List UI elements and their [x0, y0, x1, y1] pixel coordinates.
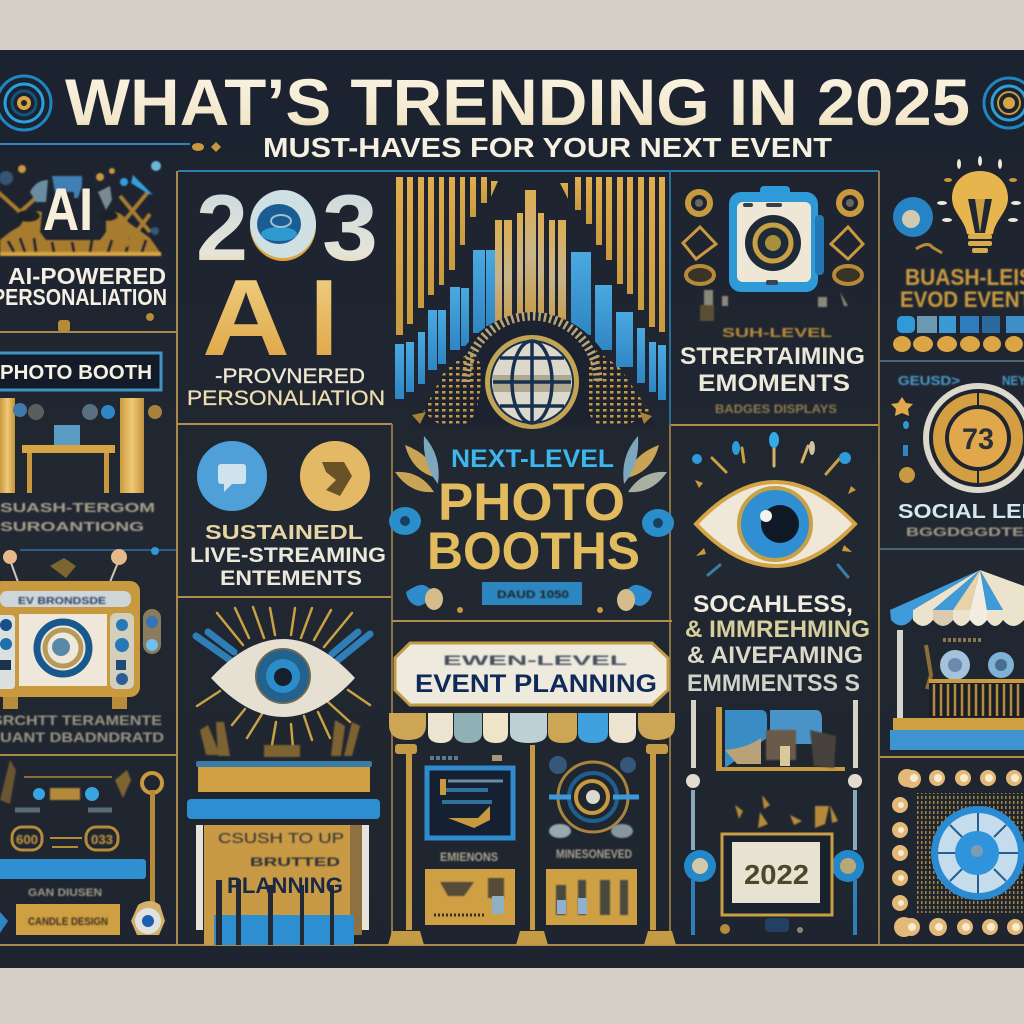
AI label: AI: [43, 176, 93, 243]
panel: light dial: [892, 769, 1024, 937]
awning: [389, 713, 675, 743]
panel: bright idea: [893, 156, 1024, 352]
enhancements text: EMOMENTS: [698, 370, 850, 397]
caption right: MINESONEVED: [556, 847, 632, 861]
gold deck: [893, 718, 1024, 730]
crown decoration: [0, 161, 162, 256]
social caption: BGGDGGDTE: [906, 525, 1024, 539]
blue banner: [187, 799, 380, 819]
TV legs: [3, 697, 127, 709]
sign small text: EWEN-LEVEL: [443, 652, 628, 668]
panel: AI powered personalization: [0, 161, 167, 310]
framed screen: [722, 834, 832, 915]
rays: [692, 432, 856, 577]
small heading: SUH-LEVEL: [722, 325, 832, 340]
planning text: PLANNING: [227, 873, 343, 898]
heading text: AI-POWERED: [8, 263, 166, 289]
panel: retro TV: [0, 547, 164, 745]
icon: chat bubble circle: [197, 441, 267, 511]
blue stripes left: [395, 250, 495, 399]
stage pillars: [196, 825, 369, 930]
pole: [897, 630, 903, 718]
panel: social and immersive: [684, 432, 870, 935]
side glyphs: [891, 397, 915, 483]
poles: [686, 700, 862, 935]
panel: 2023 AI: [187, 175, 385, 410]
NEXT-LEVEL text: NEXT-LEVEL: [451, 445, 614, 473]
blue base: [890, 730, 1024, 750]
label box: [0, 353, 161, 390]
text: & AIVEFAMING: [687, 642, 863, 669]
blue swooshes: [196, 632, 370, 660]
gold specks: [58, 313, 154, 332]
columns: [388, 744, 676, 945]
side buttons: [0, 613, 134, 689]
small headings: GEUSD>: [898, 373, 960, 388]
streaming text: STRERTAIMING: [680, 343, 865, 370]
icon: blue badge: [893, 197, 933, 237]
dotted surround: [917, 793, 1024, 913]
gold card left: [425, 869, 515, 925]
gold tick: [916, 244, 942, 253]
diamonds: [683, 227, 863, 259]
icon: key: [131, 773, 165, 935]
PHOTO text: PHOTO: [438, 473, 625, 532]
caption: SUROANTIONG: [0, 519, 144, 534]
year digit two: 2: [196, 175, 248, 280]
medal: 73: [962, 423, 994, 456]
gold fence: [929, 680, 1024, 717]
social text: SOCIAL LEI: [898, 501, 1024, 523]
small blue label text: DAUD 1050: [497, 589, 569, 601]
bulb lights: [892, 769, 1023, 937]
title: WHAT’S TRENDING IN 2025: [65, 65, 970, 139]
sign board: [395, 643, 668, 705]
bulb rays: [937, 156, 1021, 222]
stage text: CSUSH TO UP: [218, 830, 344, 847]
gold stripes left: [396, 177, 498, 335]
blue bar: [0, 859, 146, 879]
caption: [0, 500, 155, 534]
bottom specks: [720, 918, 803, 934]
partial blue tag: [0, 912, 8, 933]
small gold wings: [412, 412, 652, 424]
panel: event planning: [388, 643, 676, 945]
icon: right swirl emblem: [984, 78, 1024, 128]
dial ovals: [12, 827, 118, 850]
gold bead row: [893, 336, 1023, 352]
gold tag: [16, 904, 120, 935]
dotted gold arch: [466, 316, 598, 382]
subtitle: MUST-HAVES FOR YOUR NEXT EVENT: [263, 132, 832, 163]
top bar: [0, 591, 131, 607]
year digit three: 3: [322, 175, 378, 280]
text: LIVE-STREAMING: [190, 544, 386, 567]
gold stage: [204, 825, 350, 945]
table: [13, 403, 162, 493]
blue tiles: [897, 316, 1024, 333]
text: & IMMREHMING: [685, 616, 870, 643]
text: SUSTAINEDL: [205, 522, 363, 544]
small caption: BADGES DISPLAYS: [715, 402, 837, 416]
gold platform: [196, 761, 372, 792]
target icon: [549, 756, 639, 838]
icon: globe: [485, 335, 579, 429]
panel: sustained live-streaming: [190, 441, 386, 590]
blue discs: [684, 850, 864, 882]
icon: lightbulb: [952, 171, 1008, 253]
subtext two: PERSONALIATION: [187, 387, 385, 410]
panel: controls: [0, 760, 165, 935]
stage text: BRUTTED: [250, 855, 341, 869]
dotted gold fields: [423, 350, 650, 425]
icon: blue eyes: [389, 507, 674, 537]
oval numerals: 033: [91, 832, 113, 847]
small blue label: [482, 582, 582, 605]
indicators: [0, 760, 131, 810]
iris: [739, 488, 811, 560]
side knob: [146, 616, 158, 651]
small label: GAN DIUSEN: [28, 887, 102, 899]
gold card right: [546, 869, 637, 925]
gold rings: [688, 192, 861, 214]
panel: photo booth: [0, 353, 162, 534]
bulb highlights: [898, 774, 1020, 931]
caption left: EMIENONS: [440, 850, 498, 864]
eye: [696, 482, 855, 566]
AI letter A: A: [202, 257, 290, 379]
medal: [923, 383, 1024, 493]
TV screen: [19, 614, 107, 686]
icon: gold face circle: [300, 441, 370, 511]
curtains: [0, 398, 144, 493]
gold tag text: CANDLE DESIGN: [28, 916, 108, 928]
sign main text: EVENT PLANNING: [415, 670, 657, 698]
caption: UANT DBADNDRATD: [0, 729, 164, 745]
eye rays: [197, 607, 370, 748]
dark mound: [410, 312, 656, 425]
caption: [0, 712, 164, 745]
top bar text: EV BRONDSDE: [18, 596, 106, 607]
icon: left swirl emblem: [0, 76, 51, 130]
TV lens: [37, 622, 89, 674]
text: EMMMENTSS S: [687, 670, 860, 697]
eye: [211, 639, 355, 717]
label text: PHOTO BOOTH: [0, 362, 152, 384]
panel: eye and stage: [187, 607, 380, 945]
gold stripes right: [560, 177, 665, 332]
blue stripes right: [571, 252, 666, 400]
gold silhouettes: [200, 720, 360, 757]
small headings: [898, 373, 1024, 388]
panel: market kiosk: [890, 570, 1024, 750]
flowers: [406, 585, 652, 613]
panel: camera streaming: [680, 186, 865, 416]
panel: social leaders: [891, 373, 1024, 539]
antennae: [3, 547, 159, 582]
TV frame: [0, 581, 140, 697]
dial: [931, 806, 1024, 900]
eye glyphs: [686, 266, 862, 284]
leaves: [395, 436, 667, 492]
subtext one: -PROVNERED: [215, 365, 365, 388]
round signs: [926, 640, 1014, 689]
iris: [256, 649, 310, 703]
text: ENTEMENTS: [220, 567, 362, 590]
AI letter I: I: [310, 257, 338, 379]
2022: 2022: [744, 859, 809, 890]
small figures: [700, 290, 848, 321]
canopy: [890, 570, 1024, 626]
panel: next-level photo booths: [389, 177, 674, 613]
screen inner: [732, 842, 820, 903]
oval numerals: [16, 832, 113, 847]
panel frame lines: [0, 144, 1024, 945]
BOOTHS text: BOOTHS: [427, 522, 640, 581]
curtain stage: [716, 707, 845, 771]
gold stripes center: [495, 190, 566, 330]
stage curtain base: [214, 880, 354, 945]
blue screen: [427, 755, 513, 838]
camera: [729, 186, 824, 292]
icon: gold diamonds by rule: [192, 142, 221, 152]
gold ring centres: [695, 199, 854, 207]
text: SOCAHLESS,: [693, 591, 853, 618]
oval numerals: 600: [16, 832, 38, 847]
gold scatter: [735, 795, 838, 828]
stage text: [218, 830, 344, 869]
stage side: [350, 825, 362, 935]
caption: SUASH-TERGOM: [0, 500, 155, 515]
year eye zero: [250, 190, 316, 261]
